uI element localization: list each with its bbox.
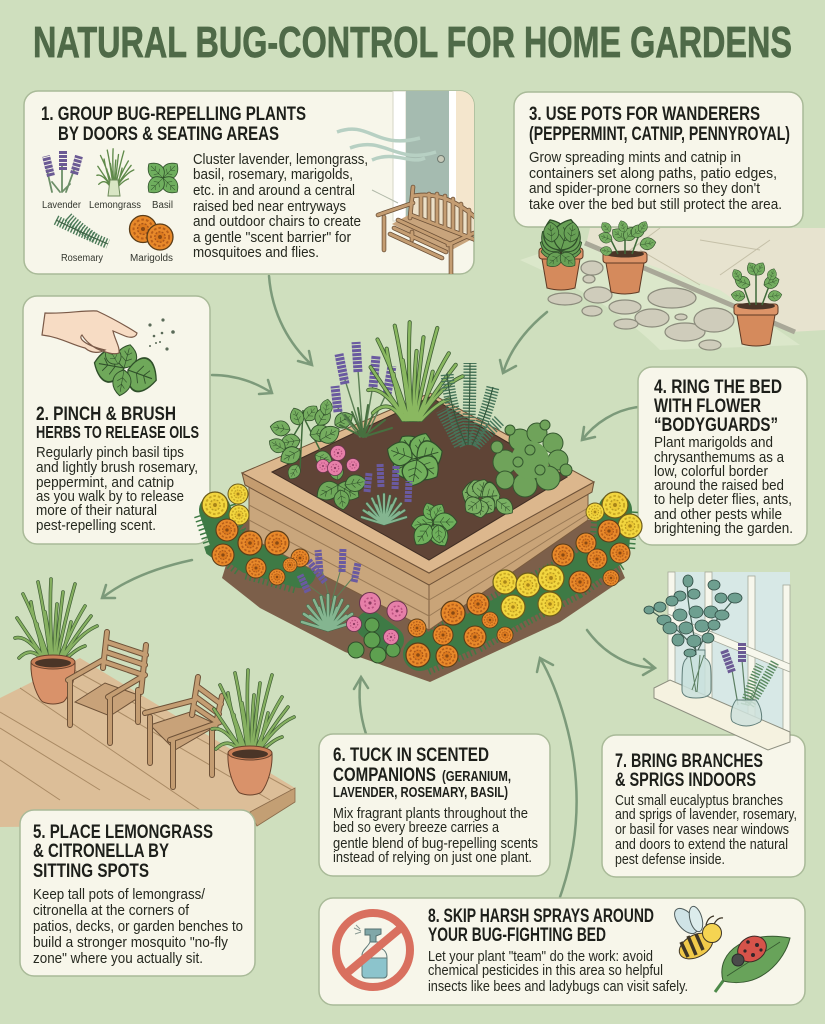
body text: raised bed near entryways	[193, 198, 346, 215]
body text: as you walk by to release	[36, 488, 184, 505]
plant: lavender	[335, 342, 392, 437]
body text: a gentle "scent barrier" for	[193, 229, 351, 246]
arrow: bed to window	[587, 630, 655, 675]
heading: YOUR BUG-FIGHTING BED	[428, 924, 606, 946]
body text: Grow spreading mints and catnip in	[529, 149, 741, 166]
heading: & SPRIGS INDOORS	[615, 769, 756, 791]
body text	[193, 151, 368, 261]
body text: around the raised bed	[654, 477, 784, 494]
body text: and outdoor chairs to create	[193, 213, 361, 230]
vase: eucalyptus	[644, 575, 742, 698]
heading: 2. PINCH & BRUSH	[36, 403, 176, 425]
body text: and other pests while	[654, 506, 782, 523]
heading: 8. SKIP HARSH SPRAYS AROUND	[428, 905, 654, 927]
body text: Mix fragrant plants throughout the	[333, 805, 528, 822]
body text: peppermint, and catnip	[36, 474, 174, 491]
soil	[272, 397, 567, 560]
pot 1	[536, 216, 586, 290]
body text: chemical pesticides in this area so helpful	[428, 962, 663, 979]
arrow: card 3 to bed	[500, 312, 547, 373]
heading: 1. GROUP BUG-REPELLING PLANTS	[41, 103, 306, 125]
body text: gentle blend of bug-repelling scents	[333, 835, 538, 852]
arrow: card 2 to bed	[212, 375, 272, 394]
body text: Cut small eucalyptus branches	[615, 792, 783, 809]
body text: low, colorful border	[654, 463, 768, 480]
plant: lower basil	[409, 501, 457, 550]
body text: brightening the garden.	[654, 520, 793, 537]
label: Lemongrass	[89, 200, 141, 211]
body text: pest-repelling scent.	[36, 517, 156, 534]
body text: bed so every breeze carries a	[333, 819, 500, 836]
icon: marigolds	[130, 216, 173, 250]
heading: COMPANIONS	[333, 764, 436, 786]
icon: bee	[670, 904, 723, 964]
heading: LAVENDER, ROSEMARY, BASIL)	[333, 785, 508, 801]
bed rim	[242, 473, 594, 585]
plant: basil	[383, 429, 446, 488]
chair left	[68, 632, 146, 743]
body text	[428, 948, 688, 995]
plant: lemongrass	[368, 322, 463, 420]
heading: 4. RING THE BED	[654, 376, 782, 398]
foliage under flowers	[215, 510, 615, 654]
body text: Plant marigolds and	[654, 434, 773, 451]
window sill	[654, 680, 790, 750]
body text: to help deter flies, ants,	[654, 491, 792, 508]
body text: or basil for vases near windows	[615, 821, 789, 838]
body text: Regularly pinch basil tips	[36, 444, 184, 461]
ground soil	[222, 520, 625, 682]
illustration: window with vases	[644, 572, 790, 750]
heading: 5. PLACE LEMONGRASS	[33, 821, 213, 843]
illustration: stone path backdrop	[520, 228, 825, 350]
heading: SITTING SPOTS	[33, 860, 149, 882]
body text: containers set along paths, patio edges,	[529, 165, 777, 182]
bed walls	[249, 483, 429, 630]
pot 2	[597, 219, 657, 294]
pot: lemongrass right	[212, 670, 294, 795]
body text: instead of relying on just one plant.	[333, 849, 532, 866]
body text: Let your plant "team" do the work: avoid	[428, 948, 653, 965]
arrow: bed to deck	[102, 560, 192, 598]
panel: 4 ring the bed	[638, 367, 807, 545]
body text	[333, 805, 538, 866]
label: Rosemary	[61, 253, 103, 264]
body text: zone" where you actually sit.	[33, 950, 203, 967]
body text: take over the bed but still protect the area.	[529, 196, 782, 213]
heading	[654, 376, 782, 436]
geraniums at bed foot	[346, 592, 407, 663]
heading	[529, 103, 790, 145]
icon: basil	[144, 159, 182, 197]
body text: citronella at the corners of	[33, 902, 190, 919]
icon: ladybug on leaf	[715, 931, 790, 992]
heading: 3. USE POTS FOR WANDERERS	[529, 103, 760, 125]
heading: & CITRONELLA BY	[33, 840, 169, 862]
panel: 5 lemongrass and citronella	[20, 810, 255, 976]
body text: insects like bees and ladybugs can visit safely.	[428, 978, 688, 995]
heading: WITH FLOWER	[654, 395, 761, 417]
icon: no spray	[336, 913, 410, 987]
illustration: deck with chairs and lemongrass pots	[0, 579, 295, 827]
marigold border	[202, 484, 642, 667]
label: Lavender	[42, 200, 82, 211]
plant: catnip	[460, 476, 517, 519]
panel: 7 bring branches indoors	[602, 735, 805, 877]
body text	[33, 886, 243, 967]
body text: and spider-prone corners so they don't	[529, 180, 761, 197]
panel: 1 group bug-repelling plants	[24, 91, 479, 274]
plant: parsley	[491, 420, 572, 497]
label: Marigolds	[130, 253, 173, 264]
pot: lemongrass left	[15, 579, 97, 704]
heading: (GERANIUM,	[442, 769, 511, 785]
illustration: hand pinching basil	[42, 311, 175, 397]
body text: mosquitoes and flies.	[193, 244, 319, 261]
body text: and lightly brush rosemary,	[36, 459, 198, 476]
plant: small lavender and grey bush	[362, 463, 409, 524]
body text: more of their natural	[36, 502, 157, 519]
illustration: door and bench	[337, 91, 479, 274]
icon: lemongrass	[97, 149, 134, 196]
heading: 7. BRING BRANCHES	[615, 750, 763, 772]
body text: basil, rosemary, marigolds,	[193, 166, 353, 183]
illustration: potted mints	[536, 216, 783, 346]
heading: 6. TUCK IN SCENTED	[333, 744, 489, 766]
arrow: card 6 to bed	[354, 677, 368, 734]
illustration: raised garden bed	[202, 322, 642, 682]
body text: patios, decks, or garden benches to	[33, 918, 243, 935]
body text: etc. in and around a central	[193, 182, 355, 199]
panel: 8 skip harsh sprays	[319, 898, 805, 1005]
plant: geranium in bed	[313, 446, 368, 511]
arrow: card 4 to bed	[582, 407, 638, 440]
heading: HERBS TO RELEASE OILS	[36, 422, 199, 442]
body text	[36, 444, 198, 534]
chair right	[145, 677, 222, 787]
heading	[428, 905, 654, 946]
panel: 2 pinch and brush	[23, 296, 210, 544]
heading	[36, 403, 199, 442]
heading	[333, 744, 511, 801]
body text	[529, 149, 782, 213]
body text	[654, 434, 793, 537]
heading: “BODYGUARDS”	[654, 414, 778, 436]
body text	[615, 792, 797, 868]
body text: pest defense inside.	[615, 851, 725, 868]
lavender at bed foot	[300, 548, 358, 630]
panel: 6 tuck in scented companions	[319, 734, 550, 876]
body text: Cluster lavender, lemongrass,	[193, 151, 368, 168]
icon: lavender	[46, 151, 79, 192]
body text: and doors to extend the natural	[615, 836, 788, 853]
heading: BY DOORS & SEATING AREAS	[58, 123, 279, 145]
body text: Keep tall pots of lemongrass/	[33, 886, 206, 903]
icon: rosemary	[56, 217, 108, 244]
heading	[33, 821, 213, 882]
arrow: card 8 to bed	[537, 658, 576, 897]
pot 3	[730, 260, 783, 346]
body text: build a stronger mosquito "no-fly	[33, 934, 228, 951]
heading	[615, 750, 763, 791]
label: Basil	[152, 200, 173, 211]
panel: 3 use pots for wanderers	[514, 92, 803, 227]
heading	[41, 103, 306, 145]
body text: chrysanthemums as a	[654, 449, 785, 466]
plant: mint	[266, 398, 356, 482]
vase: lavender and rosemary	[724, 642, 775, 726]
arrow: card 1 to bed	[269, 276, 312, 365]
plant: rosemary	[442, 363, 500, 445]
